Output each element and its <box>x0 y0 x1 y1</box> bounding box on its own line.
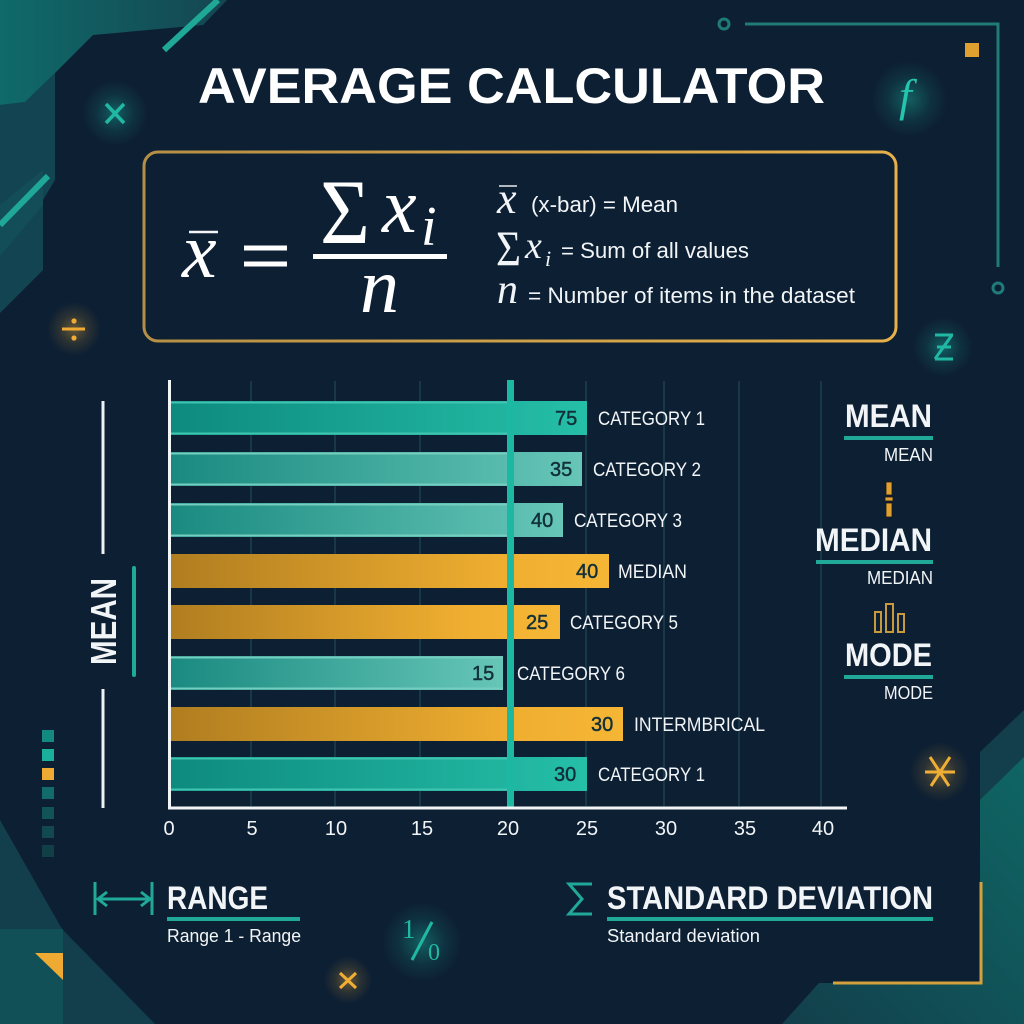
bar: category 5 <box>170 605 678 639</box>
axes <box>170 380 847 808</box>
formula legend: Σ <box>496 220 521 276</box>
swatch column <box>42 730 54 857</box>
formula: mean equals sum over n: i <box>421 196 437 258</box>
bar: category 6: CATEGORY 6 <box>517 663 625 685</box>
axis tick labels: 0 <box>163 818 175 840</box>
icon: sigma <box>569 884 592 914</box>
formula legend: = Number of items in the dataset <box>528 283 856 308</box>
formula legend <box>496 174 856 313</box>
formula legend: x <box>496 174 517 223</box>
bar: median: MEDIAN <box>618 561 687 583</box>
bar: category 2: 35 <box>550 459 572 481</box>
panel: formula <box>144 152 896 341</box>
stat: mode: MODE <box>845 637 932 673</box>
stat: mode <box>844 637 933 703</box>
corner shapes: bottom right <box>782 710 1024 1024</box>
icon: gold multiply <box>324 956 372 1004</box>
stat: range <box>167 880 301 946</box>
left axis label: mean <box>83 401 136 808</box>
icon: sigma glyph <box>913 317 973 377</box>
bar: category 1: 75 <box>555 408 577 430</box>
axis tick labels: 15 <box>411 818 433 840</box>
icon: gold asterisk <box>910 742 970 802</box>
bar chart <box>163 380 847 840</box>
stat: range: Range 1 - Range <box>167 926 301 946</box>
bar: category 2 <box>170 452 701 486</box>
formula: mean equals sum over n: x <box>181 207 217 294</box>
stat: range: RANGE <box>167 880 268 916</box>
bar: category 6 <box>170 656 625 690</box>
stat: standard deviation: STANDARD DEVIATION <box>607 880 933 916</box>
bar: category 1: CATEGORY 1 <box>598 408 705 430</box>
corner shapes: bottom left <box>0 820 155 1024</box>
icon: gold square <box>965 43 979 57</box>
formula legend: = Sum of all values <box>561 238 749 263</box>
icon: mode bars <box>875 604 904 632</box>
bar: category 2: CATEGORY 2 <box>593 459 701 481</box>
icon: fraction: 0 <box>428 940 440 966</box>
icon: fraction <box>382 902 462 982</box>
axis tick labels: 35 <box>734 818 756 840</box>
formula: mean equals sum over n: Σ <box>320 161 370 263</box>
icon: divide <box>47 302 101 356</box>
formula legend: x <box>524 225 542 267</box>
formula legend: i <box>545 246 551 271</box>
corner shapes: top left <box>0 0 227 313</box>
formula: mean equals sum over n <box>181 161 447 329</box>
bar: category 1 <box>170 401 705 435</box>
icon: range arrow <box>95 882 152 915</box>
bar: median <box>170 554 687 588</box>
bar: category 3: CATEGORY 3 <box>574 510 682 532</box>
stat: mean <box>844 398 933 465</box>
bar: intermbrical: INTERMBRICAL <box>634 714 765 736</box>
bar: category 1 lower: 30 <box>554 764 576 786</box>
icon: median marker <box>885 482 893 517</box>
decorative frame: bottom right <box>833 882 981 983</box>
bar: category 5: 25 <box>526 612 548 634</box>
bar: category 6: 15 <box>472 663 494 685</box>
bar: category 1 lower <box>170 757 705 791</box>
bar: intermbrical: 30 <box>591 714 613 736</box>
axis tick labels <box>163 818 834 840</box>
axis tick labels: 20 <box>497 818 519 840</box>
axis tick labels: 40 <box>812 818 834 840</box>
formula: mean equals sum over n: x <box>381 162 417 249</box>
title: AVERAGE CALCULATOR <box>198 58 825 114</box>
formula: mean equals sum over n: n <box>360 242 399 329</box>
axis tick labels: 10 <box>325 818 347 840</box>
left axis label: mean: MEAN <box>83 578 124 665</box>
bar: category 3: 40 <box>531 510 553 532</box>
stat: median: MEDIAN <box>815 522 932 558</box>
axis tick labels: 25 <box>576 818 598 840</box>
bar: category 5: CATEGORY 5 <box>570 612 678 634</box>
stat: standard deviation <box>607 880 933 946</box>
stat: median: MEDIAN <box>867 568 933 588</box>
icon: function f <box>871 61 947 137</box>
axis tick labels: 30 <box>655 818 677 840</box>
bar: median: 40 <box>576 561 598 583</box>
formula legend: n <box>497 267 518 313</box>
bar: category 3 <box>170 503 682 537</box>
icon: teal multiply <box>82 80 148 146</box>
bar: intermbrical <box>170 707 765 741</box>
stat: standard deviation: Standard deviation <box>607 926 760 946</box>
bar: category 1 lower: CATEGORY 1 <box>598 764 705 786</box>
axis tick labels: 5 <box>246 818 258 840</box>
stat: mean: MEAN <box>884 445 933 465</box>
decorative frame: top right <box>719 19 1003 293</box>
stat: mean: MEAN <box>845 398 932 434</box>
icon: function f: f <box>899 70 918 121</box>
mean line <box>507 380 514 807</box>
stat: mode: MODE <box>884 683 933 703</box>
icon: fraction: 1 <box>402 914 416 944</box>
stat: median <box>815 522 933 588</box>
formula legend: (x-bar) = Mean <box>531 192 678 217</box>
